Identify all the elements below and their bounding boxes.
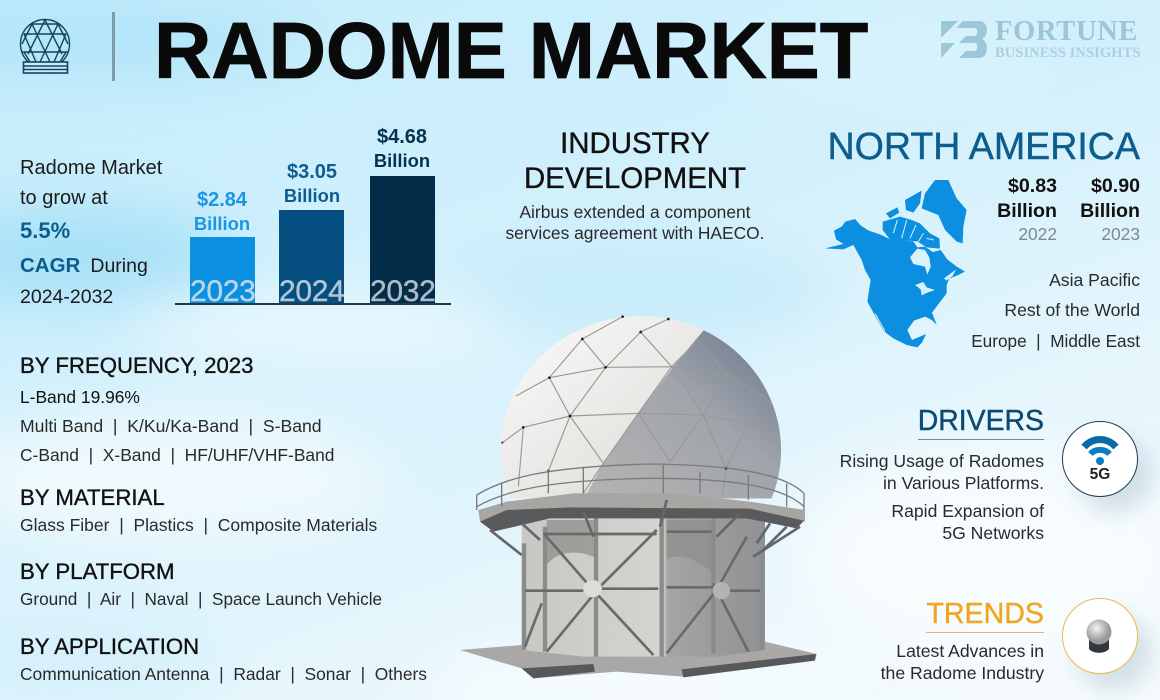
text: CAGR block: CAGR During: [20, 254, 148, 277]
value 2023: Billion: [1080, 200, 1140, 222]
heading: trends: TRENDS: [926, 598, 1044, 630]
heading: drivers: DRIVERS: [918, 405, 1044, 437]
value 2024: [284, 161, 340, 206]
icon: radome globe: [1062, 598, 1138, 674]
text: trends: [880, 641, 1044, 683]
panel: by application: Communication Antenna | Radar | Sonar | Others: [20, 664, 427, 684]
text: CAGR block: 5.5%: [20, 218, 70, 243]
value 2022: 2022: [1018, 224, 1057, 244]
text: CAGR block: Radome Market: [20, 157, 162, 179]
base slab: [460, 642, 817, 678]
logo: Fortune Business Insights: FORTUNE: [995, 16, 1138, 47]
text: CAGR block: to grow at: [20, 187, 108, 209]
panel: by frequency: BY FREQUENCY, 2023: [20, 353, 254, 378]
text: other regions: Europe | Middle East: [971, 331, 1140, 351]
panel: by platform: [20, 559, 382, 609]
value 2023: $2.84: [197, 189, 247, 211]
tower wall: [522, 517, 765, 657]
bar 2023: [190, 237, 255, 303]
bar 2024: [279, 210, 344, 303]
text: drivers: 5G Networks: [942, 523, 1044, 543]
text: other regions: [971, 270, 1140, 351]
value 2024: Billion: [284, 185, 340, 206]
heading: industry development: DEVELOPMENT: [524, 162, 746, 195]
value 2023: [1080, 175, 1140, 244]
text: trends: the Radome Industry: [881, 663, 1044, 683]
heading: North America: NORTH AMERICA: [828, 125, 1140, 167]
title: RADOME MARKET: [154, 6, 868, 95]
text: drivers: [840, 451, 1044, 543]
value 2023: 2023: [1101, 224, 1140, 244]
bar chart: market size: [175, 126, 451, 305]
value 2032: $4.68: [377, 126, 427, 148]
value 2023: [194, 189, 250, 234]
logo: Fortune Business Insights: [941, 16, 1141, 61]
logo: Fortune Business Insights: BUSINESS INSIGHTS: [995, 45, 1141, 61]
text: drivers: in Various Platforms.: [883, 473, 1044, 493]
panel: by platform: BY PLATFORM: [20, 559, 175, 584]
value 2023: Billion: [194, 213, 250, 234]
map: North America: [825, 180, 967, 348]
text: CAGR block: 2024-2032: [20, 286, 113, 308]
panel: by application: BY APPLICATION: [20, 634, 199, 659]
value 2032: Billion: [374, 150, 430, 171]
platform and railing: [478, 493, 805, 522]
axis: [175, 303, 451, 304]
value 2022: [997, 175, 1057, 244]
value 2024: $3.05: [287, 161, 337, 183]
panel: by platform: Ground | Air | Naval | Space Launch Vehicle: [20, 589, 382, 609]
value 2032: [374, 126, 430, 171]
dome: [501, 315, 781, 498]
value 2022: Billion: [997, 200, 1057, 222]
value 2022: $0.83: [1008, 175, 1057, 197]
icon: 5G: 5G: [1090, 466, 1110, 483]
panel: by frequency: Multi Band | K/Ku/Ka-Band | S-Band: [20, 416, 322, 436]
heading: industry development: [524, 127, 746, 195]
panel: by frequency: L-Band 19.96%: [20, 387, 140, 407]
icon: 5G: [1062, 421, 1138, 497]
panel: by frequency: C-Band | X-Band | HF/UHF/VHF-Band: [20, 445, 334, 465]
text: industry development: [505, 202, 765, 243]
text: other regions: Rest of the World: [1004, 300, 1140, 320]
bar 2032: [370, 176, 435, 303]
icon: radome logo: [20, 18, 70, 74]
text: other regions: Asia Pacific: [1049, 270, 1140, 290]
panel: by material: [20, 485, 377, 535]
heading: industry development: INDUSTRY: [560, 127, 710, 160]
divider bar: [112, 12, 115, 81]
text: trends: Latest Advances in: [896, 641, 1044, 661]
panel: by frequency: [20, 353, 334, 465]
panel: by material: BY MATERIAL: [20, 485, 165, 510]
panel: by material: Glass Fiber | Plastics | Composite Materials: [20, 515, 377, 535]
tower frame: [524, 513, 762, 657]
value 2023: $0.90: [1091, 175, 1140, 197]
text: industry development: Airbus extended a component: [519, 202, 751, 222]
text: drivers: Rapid Expansion of: [891, 501, 1044, 521]
panel: by application: [20, 634, 427, 684]
text: CAGR block: [20, 157, 162, 308]
text: industry development: services agreement with HAECO.: [505, 223, 765, 243]
text: drivers: Rising Usage of Radomes: [840, 451, 1044, 471]
illustration: radome tower: [460, 315, 817, 678]
